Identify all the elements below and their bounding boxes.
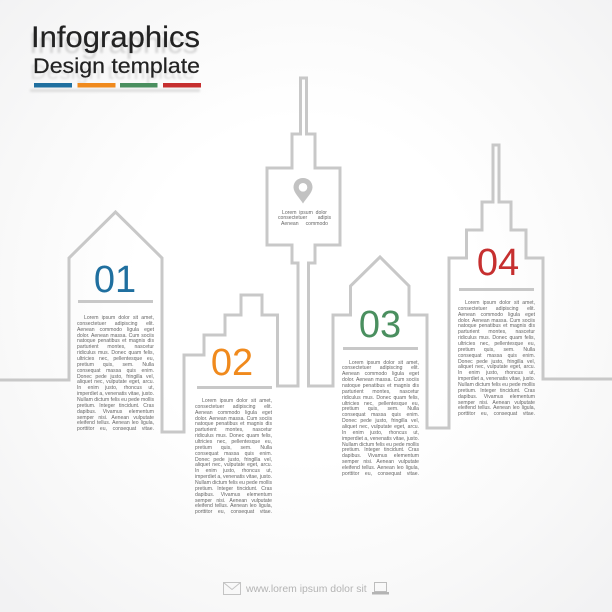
text 04: aliquet nec, vulputate eget, arcu. <box>458 364 535 370</box>
panel: center pin <box>278 178 331 227</box>
text 04 <box>458 300 535 417</box>
panel: 03 <box>342 304 419 477</box>
number 01: 01 <box>94 259 136 301</box>
text 01: parturient montes, nascetur <box>77 344 154 350</box>
text 04: Lorem ipsum dolor sit amet, <box>465 300 535 306</box>
text 04: semper nisi. Aenean vulputate <box>458 400 535 406</box>
text 02: pretium quis, sem. Nulla <box>195 445 272 451</box>
text 04: Nullam dictum felis eu pede mollis <box>458 382 535 388</box>
number 04: 04 <box>477 242 519 284</box>
footer url: www.lorem ipsum dolor sit <box>246 584 367 595</box>
text 03: porttitor eu, consequat vitae. <box>342 471 419 477</box>
text 01: dapibus. Vivamus elementum <box>77 409 154 415</box>
text 02: Lorem ipsum dolor sit amet, <box>202 398 272 404</box>
text 01: Nullam dictum felis eu pede mollis <box>77 397 154 403</box>
divider 03 <box>343 346 418 350</box>
text 04: natoque penatibus et magnis dis <box>458 323 535 329</box>
footer <box>223 582 389 595</box>
text 01: pretium quis, sem. Nulla <box>77 362 154 368</box>
text 01: semper nisi. Aenean vulputate <box>77 415 154 421</box>
text 04: consequat massa quis enim. <box>458 353 535 359</box>
text 01: pretium. Integer tincidunt. Cras <box>77 403 154 409</box>
text 01: eleifend tellus. Aenean leo ligula, <box>77 420 154 426</box>
text 04: pretium. Integer tincidunt. Cras <box>458 388 535 394</box>
divider 04 <box>459 288 534 290</box>
panel: 02 <box>195 342 272 515</box>
text 01: aliquet nec, vulputate eget, arcu. <box>77 379 154 385</box>
divider 02 <box>197 386 272 388</box>
text 02: semper nisi. Aenean vulputate <box>195 498 272 504</box>
text 03: imperdiet a, venenatis vitae, justo. <box>342 436 419 442</box>
text 03: consequat massa quis enim. <box>342 412 419 418</box>
text 01: imperdiet a, venenatis vitae, justo. <box>77 391 154 397</box>
text 02: Aenean commodo ligula eget <box>195 410 272 416</box>
text 03: Lorem ipsum dolor sit amet, <box>349 360 419 366</box>
pin text <box>278 210 331 227</box>
text 02: parturient montes, nascetur <box>195 427 272 433</box>
text 04: In enim justo, rhoncus ut, <box>458 370 535 376</box>
text 02: consectetuer adipiscing elit. <box>195 404 272 410</box>
text 03: consectetuer adipiscing elit. <box>342 365 419 371</box>
text 03: Nullam dictum felis eu pede mollis <box>342 442 419 448</box>
text 02: natoque penatibus et magnis dis <box>195 421 272 427</box>
text 01 <box>77 315 154 432</box>
text 01: consectetuer adipiscing elit. <box>77 321 154 327</box>
title block: Design template <box>30 61 195 84</box>
divider 01 <box>78 300 153 302</box>
text 01: natoque penatibus et magnis dis <box>77 338 154 344</box>
text 02: Donec pede justo, fringilla vel, <box>195 457 272 463</box>
title block: Infographics <box>31 21 200 54</box>
text 01: consequat massa quis enim. <box>77 368 154 374</box>
text 01: ridiculus mus. Donec quam felis, <box>77 350 154 356</box>
icon: laptop <box>372 582 389 594</box>
text 04: dapibus. Vivamus elementum <box>458 394 535 400</box>
panel: 04 <box>458 242 535 417</box>
text 03: pretium. Integer tincidunt. Cras <box>342 447 419 453</box>
text 02: In enim justo, rhoncus ut, <box>195 468 272 474</box>
pin text: consectetuer adipis <box>278 215 331 221</box>
icon: map pin <box>294 178 312 204</box>
text 03: Donec pede justo, fringilla vel, <box>342 418 419 424</box>
text 01: Aenean commodo ligula eget <box>77 327 154 333</box>
text 04: dolor. Aenean massa. Cum sociis <box>458 318 535 324</box>
text 03: natoque penatibus et magnis dis <box>342 383 419 389</box>
title block: Design template <box>33 55 200 78</box>
number 03: 03 <box>359 304 401 346</box>
title block: Infographics <box>29 27 198 60</box>
text 03 <box>342 360 419 477</box>
text 01: Lorem ipsum dolor sit amet, <box>84 315 154 321</box>
text 03: dapibus. Vivamus elementum <box>342 453 419 459</box>
text 03: Aenean commodo ligula eget <box>342 371 419 377</box>
text 04: pretium quis, sem. Nulla <box>458 347 535 353</box>
text 02: eleifend tellus. Aenean leo ligula, <box>195 503 272 509</box>
text 01: In enim justo, rhoncus ut, <box>77 385 154 391</box>
text 02: dapibus. Vivamus elementum <box>195 492 272 498</box>
text 02: ultricies nec, pellentesque eu, <box>195 439 272 445</box>
text 02: porttitor eu, consequat vitae. <box>195 509 272 515</box>
text 03: semper nisi. Aenean vulputate <box>342 459 419 465</box>
number 02: 02 <box>211 342 253 384</box>
text 02 <box>195 398 272 515</box>
text 04: consectetuer adipiscing elit. <box>458 306 535 312</box>
text 03: eleifend tellus. Aenean leo ligula, <box>342 465 419 471</box>
text 03: dolor. Aenean massa. Cum sociis <box>342 377 419 383</box>
text 03: ridiculus mus. Donec quam felis, <box>342 395 419 401</box>
pin text: Lorem ipsum dolor <box>282 210 327 216</box>
text 03: aliquet nec, vulputate eget, arcu. <box>342 424 419 430</box>
text 02: pretium. Integer tincidunt. Cras <box>195 486 272 492</box>
text 04: Donec pede justo, fringilla vel, <box>458 359 535 365</box>
text 01: ultricies nec, pellentesque eu, <box>77 356 154 362</box>
text 01: dolor. Aenean massa. Cum sociis <box>77 333 154 339</box>
icon: envelope <box>223 582 241 595</box>
text 04: ridiculus mus. Donec quam felis, <box>458 335 535 341</box>
text 04: eleifend tellus. Aenean leo ligula, <box>458 405 535 411</box>
panel: 01 <box>77 259 154 432</box>
text 02: aliquet nec, vulputate eget, arcu. <box>195 462 272 468</box>
pin text: Aenean commodo <box>281 221 328 227</box>
text 02: consequat massa quis enim. <box>195 451 272 457</box>
text 04: parturient montes, nascetur <box>458 329 535 335</box>
text 01: porttitor eu, consequat vitae. <box>77 426 154 432</box>
text 02: Nullam dictum felis eu pede mollis <box>195 480 272 486</box>
title block <box>29 21 201 92</box>
text 01: Donec pede justo, fringilla vel, <box>77 374 154 380</box>
text 03: In enim justo, rhoncus ut, <box>342 430 419 436</box>
text 02: imperdiet a, venenatis vitae, justo. <box>195 474 272 480</box>
text 02: ridiculus mus. Donec quam felis, <box>195 433 272 439</box>
text 04: porttitor eu, consequat vitae. <box>458 411 535 417</box>
text 02: dolor. Aenean massa. Cum sociis <box>195 416 272 422</box>
text 03: parturient montes, nascetur <box>342 389 419 395</box>
text 03: ultricies nec, pellentesque eu, <box>342 401 419 407</box>
text 04: ultricies nec, pellentesque eu, <box>458 341 535 347</box>
text 03: pretium quis, sem. Nulla <box>342 406 419 412</box>
text 04: Aenean commodo ligula eget <box>458 312 535 318</box>
text 04: imperdiet a, venenatis vitae, justo. <box>458 376 535 382</box>
